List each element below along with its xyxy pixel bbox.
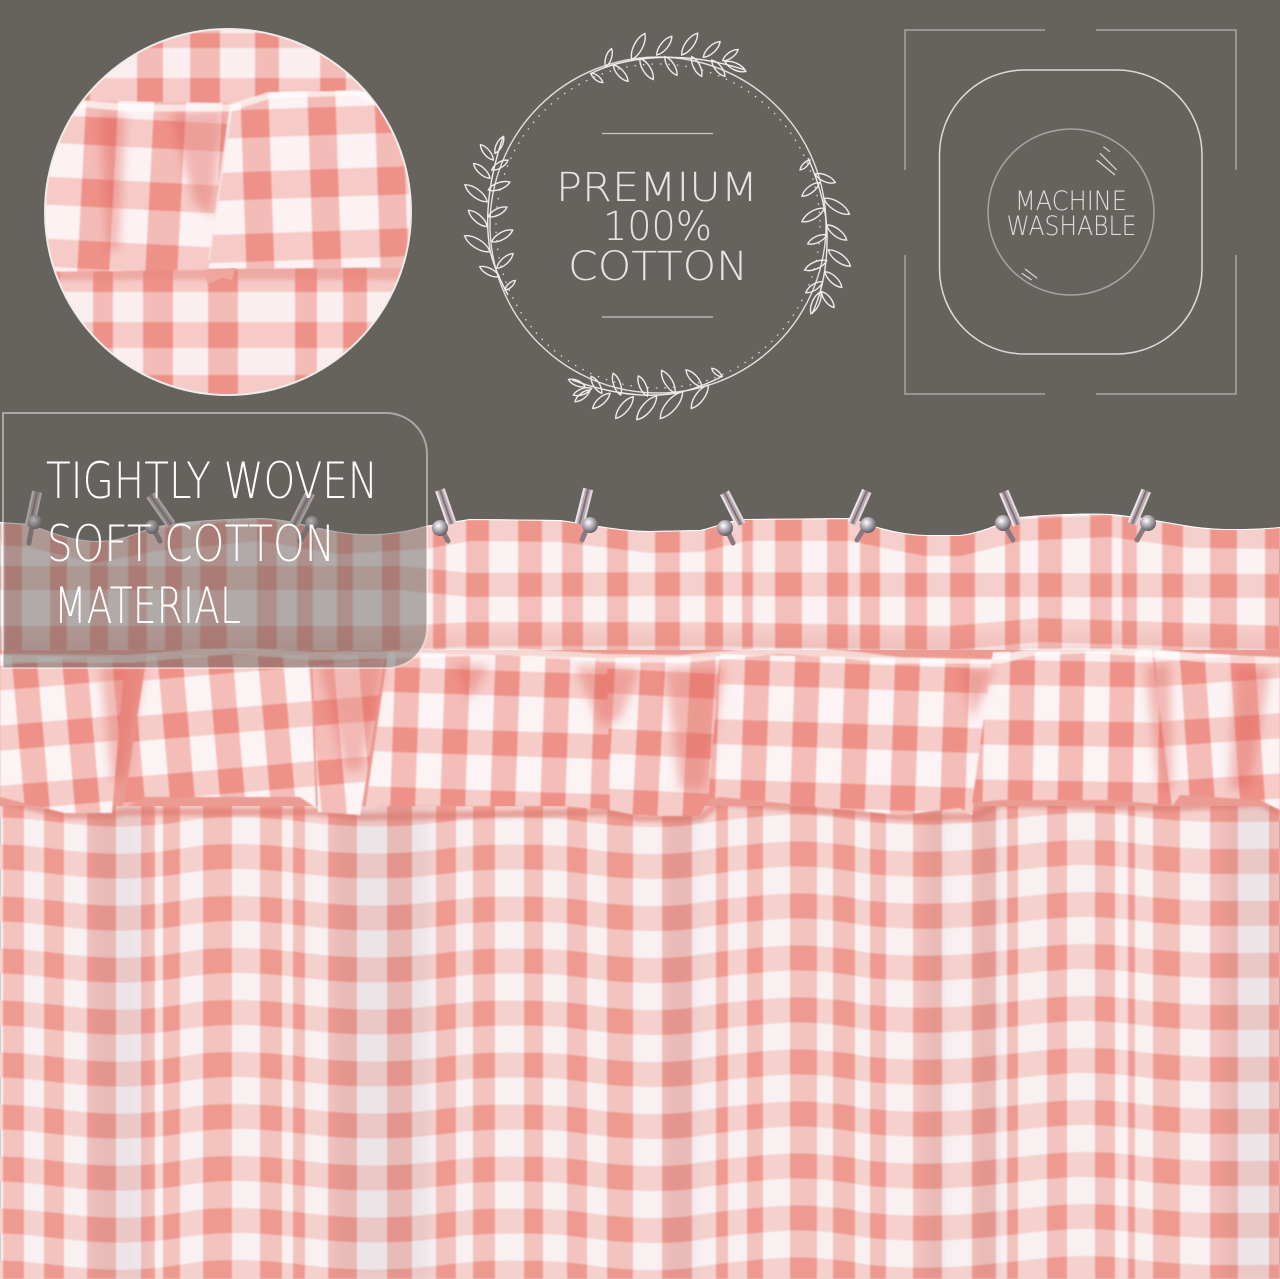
inset seam bbox=[80, 92, 372, 112]
ruffle panel B bbox=[123, 655, 316, 808]
inset fabric background bbox=[56, 30, 402, 394]
inset fold shadows bbox=[98, 104, 230, 254]
clip 5 bbox=[995, 490, 1022, 540]
wreath rule bottom bbox=[602, 316, 713, 318]
inset right ruffle bbox=[208, 90, 420, 269]
frame corners bbox=[905, 30, 1236, 394]
glint top bbox=[1097, 147, 1117, 175]
ruffle panels group bbox=[0, 650, 1280, 816]
ruffle panel E bbox=[972, 650, 1172, 805]
inset ring bbox=[45, 29, 411, 395]
wreath text: cotton: COTTON bbox=[568, 244, 748, 290]
inner circle bbox=[988, 129, 1154, 295]
ruffle panel C bbox=[365, 652, 610, 810]
wreath branch: top bbox=[590, 31, 747, 84]
translucent panel bbox=[3, 413, 427, 668]
inset ruffle shadow bbox=[40, 264, 420, 280]
ruffle panel F bbox=[1152, 650, 1280, 810]
ruffle panel D bbox=[708, 654, 993, 815]
panel text line 3: MATERIAL bbox=[54, 577, 241, 635]
clip 8 behind panel bbox=[145, 492, 175, 541]
under-ruffle shadow bbox=[0, 800, 1280, 818]
panel text line 1: TIGHTLY WOVEN bbox=[46, 452, 378, 510]
ruffle fold shadows bbox=[100, 662, 1270, 790]
wreath branch: bottom bbox=[567, 367, 723, 423]
wreath text: premium: PREMIUM bbox=[556, 165, 758, 211]
clip 4 bbox=[848, 489, 876, 540]
wreath text: 100%: 100% bbox=[603, 204, 712, 250]
clip 3 bbox=[717, 490, 745, 543]
curtain clips row bbox=[25, 488, 1156, 543]
ruffle base bbox=[0, 650, 1280, 806]
clip 6 bbox=[1128, 489, 1156, 540]
machine washable badge bbox=[905, 30, 1236, 394]
inset circle: ruffle close-up bbox=[44, 28, 412, 396]
clip 7 behind panel bbox=[25, 491, 42, 543]
inset knot bbox=[203, 268, 235, 284]
premium cotton wreath badge bbox=[462, 31, 853, 423]
glint bottom bbox=[1022, 269, 1037, 280]
curtain lower panel: gingham bbox=[0, 780, 1280, 1279]
curtain top header band bbox=[0, 514, 1280, 650]
inset left ruffle bbox=[30, 100, 230, 272]
wreath dotted ring bbox=[496, 64, 820, 388]
wreath branch: left bbox=[462, 135, 517, 295]
wreath branch: right bbox=[799, 158, 853, 315]
rounded square bbox=[940, 70, 1202, 354]
clip 9 behind panel bbox=[290, 490, 319, 541]
badge text: washable: WASHABLE bbox=[1006, 211, 1136, 242]
clip 1 bbox=[432, 488, 456, 541]
ruffle panel C2 bbox=[607, 656, 725, 816]
ruffle bbox=[0, 649, 1280, 818]
ruffle panel A bbox=[0, 655, 125, 813]
panel text line 2: SOFT COTTON bbox=[47, 515, 335, 573]
clip 2 bbox=[575, 488, 598, 540]
ruffle panel B2 bbox=[312, 655, 385, 815]
ruffle gathered seam bbox=[0, 649, 1280, 663]
badge text: machine: MACHINE bbox=[1015, 186, 1127, 217]
text panel: tightly woven soft cotton material bbox=[3, 413, 427, 668]
wreath rule top bbox=[602, 132, 713, 134]
wreath ring bbox=[490, 57, 826, 393]
